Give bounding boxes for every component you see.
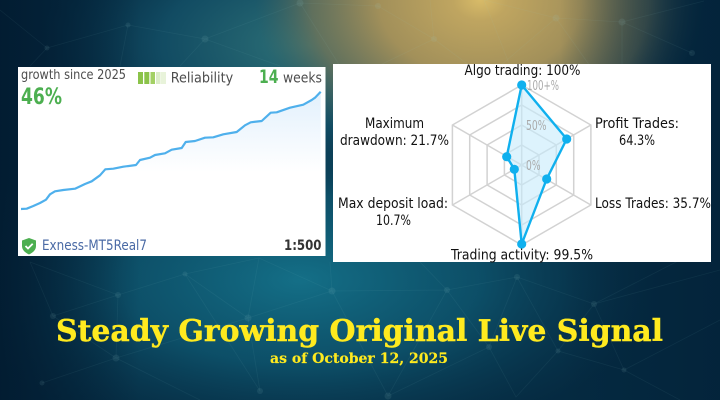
icon: reliability bars bbox=[138, 72, 166, 84]
radar metric labels: Algo trading: 100% bbox=[464, 63, 580, 79]
radar metric labels: 10.7% bbox=[376, 213, 411, 229]
value: 14 weeks: weeks bbox=[283, 70, 322, 86]
radar axis labels: 50% bbox=[526, 119, 546, 134]
panel: growth card bbox=[18, 67, 326, 256]
label: reliability: Reliability bbox=[171, 70, 234, 86]
radar metric labels: Maximum bbox=[365, 116, 424, 132]
title: Steady Growing Original Live Signal bbox=[56, 313, 663, 348]
radar metric labels: 64.3% bbox=[619, 133, 655, 149]
radar metric labels bbox=[338, 63, 711, 264]
radar axis labels bbox=[526, 79, 559, 174]
radar metric labels: drawdown: 21.7% bbox=[340, 133, 449, 149]
radar data shape bbox=[502, 80, 571, 249]
radar axis labels: 0% bbox=[526, 159, 540, 174]
value: 14 weeks: 14 bbox=[259, 67, 279, 88]
radar metric labels: Max deposit load: bbox=[338, 196, 448, 212]
radar metric labels: Trading activity: 99.5% bbox=[450, 248, 593, 264]
icon: green shield bbox=[22, 238, 36, 254]
panel: radar chart bbox=[333, 63, 711, 264]
radar metric labels: Profit Trades: bbox=[595, 116, 679, 132]
growth area fill bbox=[21, 92, 321, 236]
subtitle: as of October 12, 2025 bbox=[270, 351, 448, 367]
value: 46%: 46% bbox=[21, 84, 62, 110]
growth line chart bbox=[21, 92, 321, 209]
radar grid bbox=[452, 85, 591, 245]
label: leverage: 1:500 bbox=[284, 238, 322, 254]
label: growth since 2025: growth since 2025 bbox=[21, 67, 126, 83]
value: 14 weeks bbox=[259, 67, 322, 88]
label: server name: Exness-MT5Real7 bbox=[42, 238, 147, 254]
radar axis labels: 100+% bbox=[527, 79, 559, 94]
